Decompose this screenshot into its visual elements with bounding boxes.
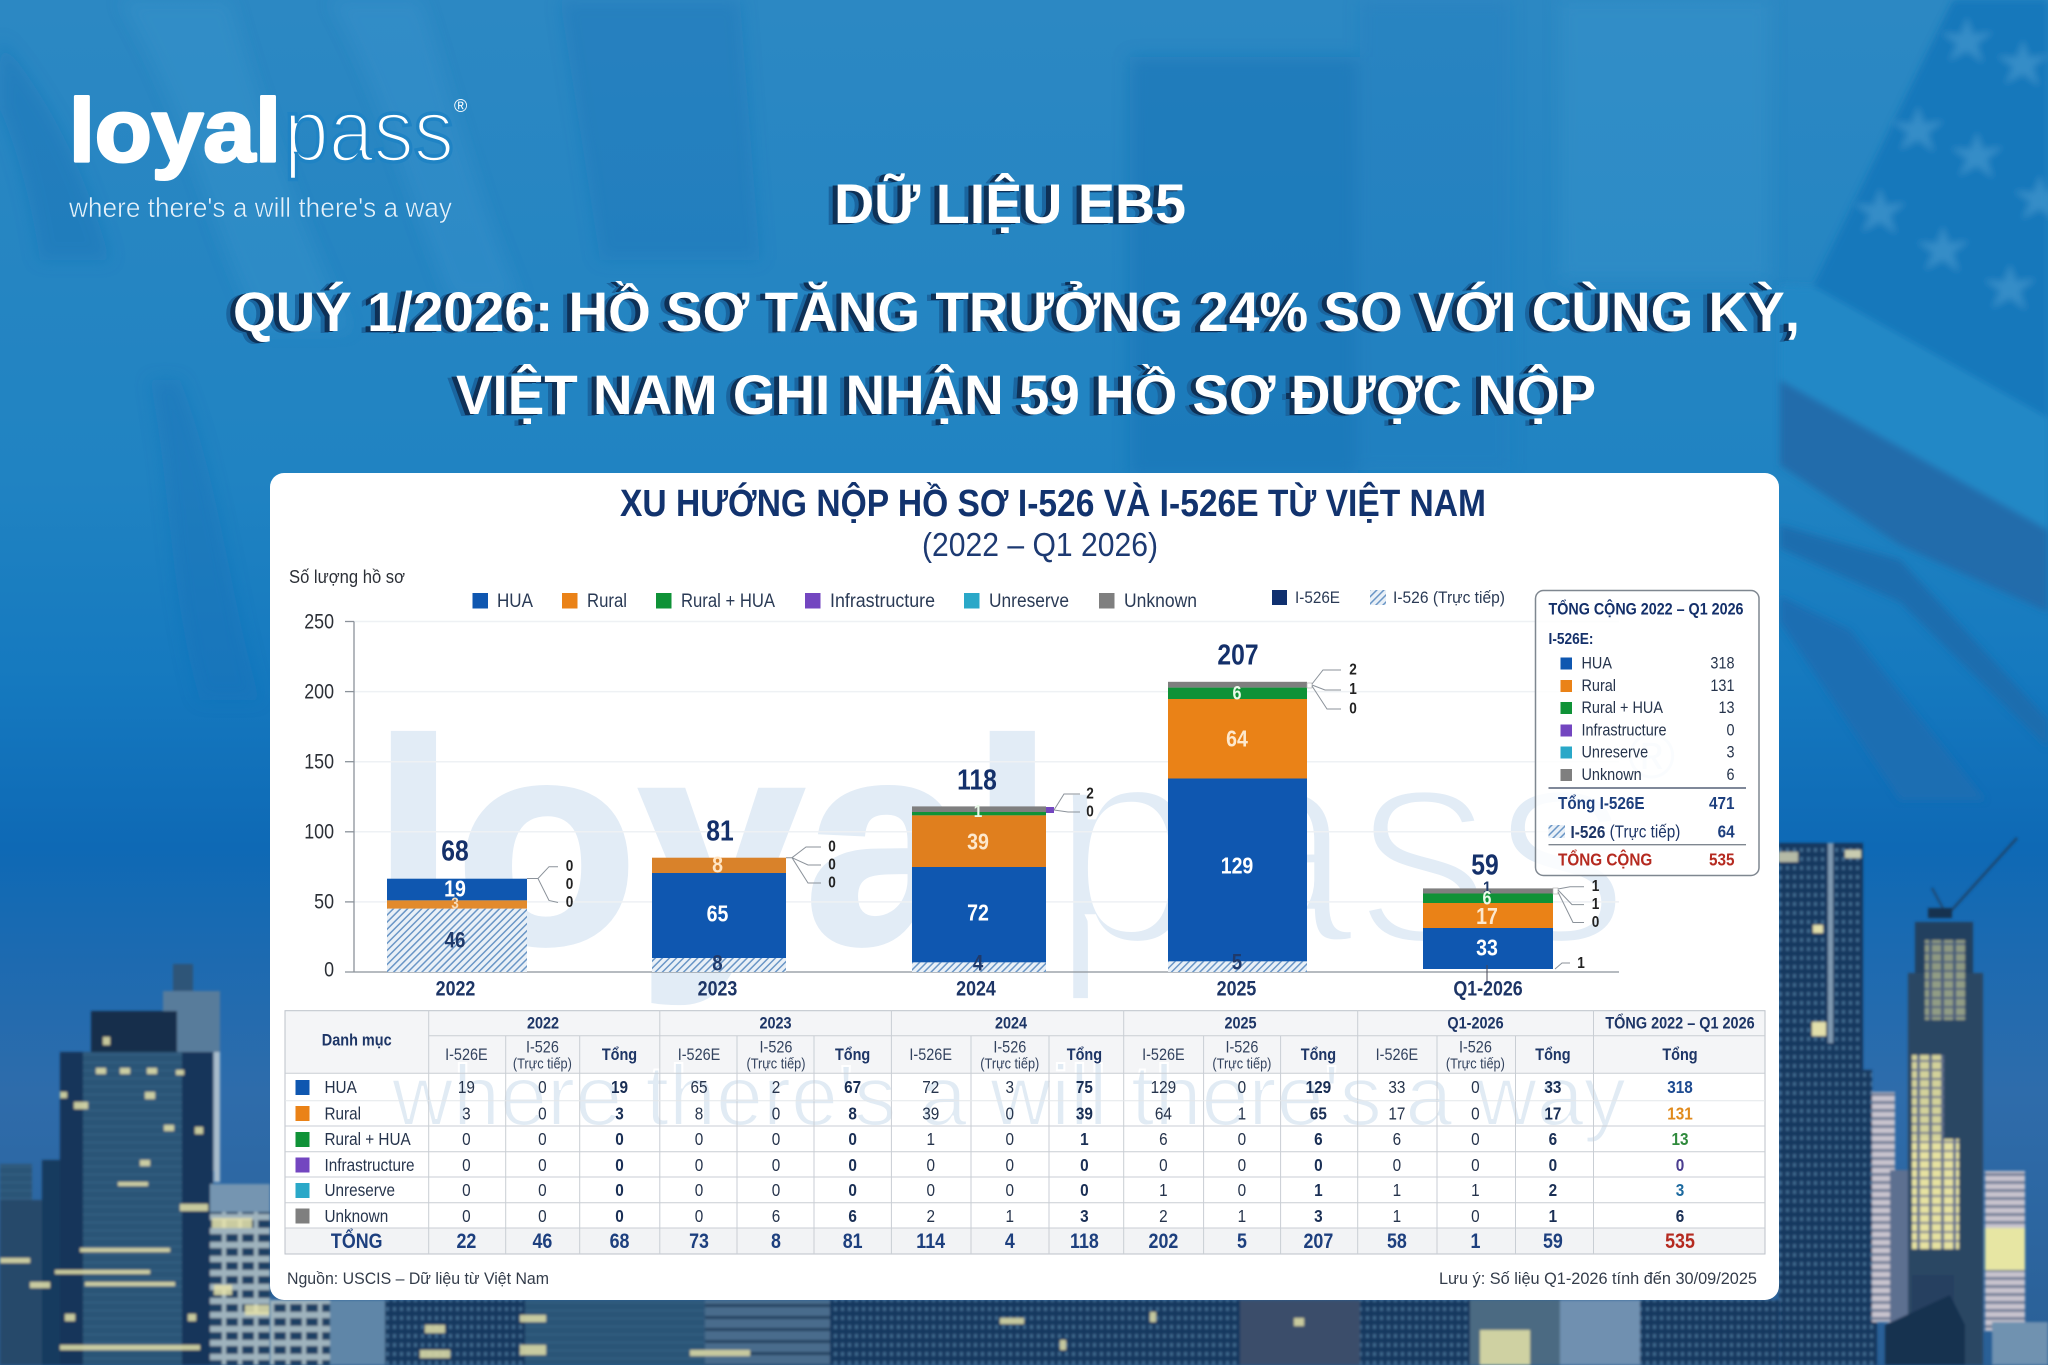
table header: I-526	[993, 1039, 1026, 1057]
summary: category rows: Infrastructure	[1582, 721, 1667, 740]
table row: total: 114	[916, 1229, 945, 1253]
table row: total: 68	[610, 1229, 630, 1253]
table row: Rural + HUA: 0	[1006, 1129, 1014, 1150]
table row: Unreserve: Unreserve	[325, 1180, 395, 1201]
chart: stacked bars	[304, 610, 1619, 1001]
summary: category rows: Rural	[1582, 677, 1616, 695]
bar 2025: 207	[1217, 639, 1259, 671]
bar 2023: 65	[707, 901, 728, 927]
table row: HUA: 318	[1667, 1077, 1693, 1098]
bar 2023: 8	[712, 952, 723, 976]
table row: HUA: 2	[772, 1077, 780, 1098]
axes and gridlines: 50	[314, 890, 334, 914]
table row: Infrastructure: 0	[848, 1155, 857, 1175]
skyline: strip below the card	[270, 1300, 1780, 1365]
table row: Unreserve: 1	[1471, 1180, 1480, 1201]
table row: total	[331, 1227, 1695, 1253]
table row: Infrastructure: 0	[1159, 1155, 1168, 1175]
table row: Unknown: 6	[1676, 1206, 1684, 1226]
axes and gridlines: 200	[304, 680, 334, 704]
table row: Infrastructure: 0	[772, 1155, 780, 1175]
table row: Unknown: 0	[538, 1206, 547, 1226]
table row: HUA: 65	[690, 1077, 708, 1098]
table row: Rural: 64	[1155, 1103, 1172, 1124]
summary: category rows	[1560, 654, 1735, 784]
bar 2024: 4	[973, 952, 984, 976]
table row: Rural: 17	[1388, 1103, 1405, 1124]
panel: totals summary box: I-526 (Trực tiếp)	[1570, 821, 1680, 842]
table header: 2022	[527, 1015, 559, 1033]
bar Q1-2026	[1423, 849, 1599, 982]
axes and gridlines: 150	[304, 750, 334, 774]
table row: HUA: 129	[1151, 1077, 1176, 1098]
table row: Unreserve: 0	[1238, 1180, 1246, 1201]
bar 2024: 1	[974, 801, 982, 821]
summary: category rows: 0	[1726, 721, 1735, 740]
table header: I-526E	[678, 1046, 720, 1064]
x axis labels: Q1-2026	[1453, 977, 1523, 1001]
legend: categories: Rural + HUA	[681, 591, 775, 612]
table row: Infrastructure: Infrastructure	[325, 1155, 415, 1175]
footnote: Lưu ý: Số liệu Q1-2026 tính đến 30/09/2025	[1439, 1269, 1757, 1288]
table row: Rural + HUA	[296, 1129, 1689, 1150]
bar 2022: 3	[451, 895, 459, 913]
bar 2023: 0	[828, 838, 836, 856]
table row: total: 535	[1665, 1229, 1695, 1253]
table row: Unknown: 2	[926, 1206, 935, 1226]
axes and gridlines: 250	[304, 610, 334, 634]
table row: Infrastructure: 0	[615, 1155, 624, 1175]
table row: Rural: 3	[462, 1103, 471, 1124]
table header: Tổng	[602, 1045, 637, 1064]
table header: Tổng	[1535, 1045, 1571, 1064]
table header: (Trực tiếp)	[980, 1055, 1039, 1072]
bar 2022: 0	[566, 894, 573, 911]
table row: Rural: 0	[538, 1103, 547, 1124]
table row: HUA: 0	[538, 1077, 547, 1098]
table header: Tổng	[835, 1045, 870, 1064]
table row: Unknown: 6	[772, 1206, 780, 1226]
bar 2025: 129	[1221, 853, 1253, 879]
table row: Rural	[296, 1103, 1693, 1124]
bar 2024: 2	[1086, 785, 1094, 803]
table header: Tổng	[1067, 1045, 1102, 1064]
table row: Unreserve: 0	[695, 1180, 703, 1201]
table row: Infrastructure: 0	[695, 1155, 703, 1175]
table: data by category and year	[285, 1011, 1765, 1254]
title: headline block	[233, 172, 1800, 426]
table row: Rural + HUA: 1	[926, 1129, 935, 1150]
table row: total: 73	[689, 1229, 709, 1253]
table header: (Trực tiếp)	[1212, 1055, 1271, 1072]
table header: Tổng	[1662, 1045, 1698, 1064]
legend: categories: Unreserve	[989, 591, 1069, 612]
table row: HUA: 67	[844, 1077, 861, 1098]
table row: Rural: 0	[772, 1103, 780, 1124]
table header: I-526	[760, 1039, 793, 1057]
table row: Rural: 39	[1076, 1103, 1093, 1124]
table row: Infrastructure: 0	[538, 1155, 547, 1175]
watermark: loyalpass: pass	[1050, 681, 1630, 1006]
table row: Unknown: 0	[462, 1206, 471, 1226]
table row: total: 118	[1070, 1229, 1099, 1253]
table row: HUA: 19	[458, 1077, 475, 1098]
legend: form types	[1272, 588, 1505, 607]
logo tagline: where there's a will there's a way	[68, 192, 452, 223]
table row: Unknown: 0	[615, 1206, 624, 1226]
table row: Infrastructure: 0	[1006, 1155, 1014, 1175]
bar 2025: 0	[1349, 701, 1357, 718]
table row: Rural: 0	[1006, 1103, 1014, 1124]
bar 2025: 6	[1233, 682, 1242, 704]
bar 2023: 8	[712, 852, 723, 878]
title line 1: DỮ LIỆU EB5	[834, 172, 1186, 235]
table row: total: 8	[771, 1229, 781, 1253]
table row: Unknown: 0	[1471, 1206, 1480, 1226]
table row: Rural + HUA: 0	[462, 1129, 471, 1150]
legend: categories: HUA	[497, 591, 533, 612]
table row: Rural + HUA: 6	[1314, 1129, 1323, 1150]
table row: Rural + HUA: 6	[1159, 1129, 1168, 1150]
bar 2024: 118	[957, 764, 997, 796]
table row: Unknown: 1	[1006, 1206, 1014, 1226]
x axis labels	[436, 977, 1523, 1001]
bar Q1-2026: 0	[1592, 914, 1599, 931]
logo: loyalpass	[68, 80, 467, 223]
table row: Unreserve: 0	[1080, 1180, 1089, 1201]
chart heading: XU HƯỚNG NỘP HỒ SƠ I-526 VÀ I-526E TỪ VIỆT NAM	[620, 480, 1486, 525]
x axis labels: 2025	[1217, 977, 1257, 1001]
table row: Unreserve: 0	[772, 1180, 780, 1201]
table row: Rural + HUA: 0	[772, 1129, 780, 1150]
table row: Infrastructure: 0	[1471, 1155, 1480, 1175]
summary: category rows: 13	[1718, 699, 1735, 717]
legend: form types: I-526 (Trực tiếp)	[1393, 588, 1505, 607]
table row: Rural + HUA: 1	[1080, 1129, 1089, 1150]
table row: Unknown: 1	[1549, 1206, 1557, 1226]
legend: categories: Unknown	[1124, 591, 1197, 612]
bar 2025: 5	[1232, 951, 1242, 975]
table row: Infrastructure: 0	[1676, 1155, 1684, 1175]
table header: I-526	[526, 1039, 559, 1057]
watermark: loyalpass: ®	[1628, 720, 1675, 792]
bar 2024: 0	[1086, 803, 1094, 821]
table row: Rural + HUA: 0	[695, 1129, 703, 1150]
table row: Unreserve: 2	[1549, 1180, 1557, 1201]
table row: HUA: 3	[1006, 1077, 1014, 1098]
legend: categories	[472, 591, 1197, 612]
table row: Unknown: 6	[848, 1206, 857, 1226]
table row: total: 59	[1543, 1229, 1563, 1253]
table row: HUA: 75	[1076, 1077, 1093, 1098]
table header	[322, 1012, 1755, 1072]
table row: HUA: 129	[1306, 1077, 1331, 1098]
table row: Rural + HUA: 13	[1671, 1129, 1689, 1150]
table row: total: TỔNG	[331, 1227, 382, 1253]
table row: HUA: 72	[922, 1077, 939, 1098]
bar 2023: 0	[828, 874, 836, 892]
table row: total: 58	[1387, 1229, 1407, 1253]
table row: total: 202	[1149, 1229, 1178, 1253]
summary: category rows: 3	[1726, 743, 1735, 762]
skyline: right buildings	[1778, 838, 2048, 1365]
table row: Rural: 3	[615, 1103, 624, 1124]
table header: 2023	[759, 1015, 792, 1033]
table row: Rural: 8	[695, 1103, 703, 1124]
bar 2024: 72	[967, 900, 989, 926]
table row: Unreserve: 1	[1159, 1180, 1168, 1201]
panel: totals summary box: TỔNG CỘNG 2022 – Q1 2026	[1548, 600, 1744, 618]
panel: totals summary box: 535	[1709, 849, 1735, 870]
panel: totals summary box: I-526E:	[1548, 631, 1594, 648]
table row: HUA	[296, 1077, 1693, 1098]
panel: white chart card	[270, 473, 1779, 1300]
skyline: left buildings	[0, 964, 270, 1365]
bar Q1-2026: 1	[1592, 878, 1599, 895]
table row: Rural: 65	[1310, 1103, 1327, 1124]
table row: Unknown: 3	[1080, 1206, 1089, 1226]
table row: total: 46	[532, 1229, 552, 1253]
table row: Infrastructure: 0	[1393, 1155, 1401, 1175]
table header: (Trực tiếp)	[746, 1055, 806, 1072]
table row: HUA: 0	[1238, 1077, 1246, 1098]
table row: Unreserve: 0	[1006, 1180, 1014, 1201]
table row: Unreserve: 3	[1676, 1180, 1684, 1201]
axes and gridlines: 100	[304, 820, 334, 844]
table header: I-526E	[909, 1046, 952, 1064]
table row: Rural + HUA: 0	[538, 1129, 547, 1150]
table header: (Trực tiếp)	[513, 1055, 572, 1072]
table row: Infrastructure: 0	[926, 1155, 935, 1175]
source note: Nguồn: USCIS – Dữ liệu từ Việt Nam	[287, 1269, 549, 1288]
table header: 2025	[1224, 1015, 1257, 1033]
table row: Unknown: 0	[695, 1206, 703, 1226]
table row: Rural + HUA: Rural + HUA	[325, 1129, 412, 1150]
table row: Unknown: 1	[1393, 1206, 1401, 1226]
summary: category rows: Rural + HUA	[1582, 699, 1663, 717]
table row: total: 207	[1304, 1229, 1333, 1253]
bar 2022	[387, 835, 573, 972]
table row: Unknown: 3	[1314, 1206, 1323, 1226]
axes and gridlines: 0	[324, 958, 334, 982]
panel: totals summary box: Tổng I-526E	[1558, 793, 1645, 813]
table row: total: 81	[843, 1229, 863, 1253]
summary: category rows: 318	[1710, 654, 1735, 673]
summary: category rows: Unknown	[1582, 766, 1642, 784]
table row: Rural: 0	[1471, 1103, 1480, 1124]
bar 2025	[1168, 639, 1357, 975]
table row: Rural: 39	[922, 1103, 939, 1124]
table row: Infrastructure	[296, 1155, 1684, 1175]
table row: HUA: 19	[611, 1077, 628, 1098]
bar Q1-2026: 1	[1592, 896, 1599, 913]
summary: category rows: Unreserve	[1582, 743, 1648, 762]
bar 2025: 1	[1349, 681, 1357, 698]
table row: HUA: HUA	[325, 1077, 358, 1098]
table row: Unknown: Unknown	[325, 1206, 388, 1226]
table row: Rural + HUA: 0	[1238, 1129, 1246, 1150]
bar Q1-2026: 59	[1471, 849, 1499, 881]
table row: HUA: 33	[1388, 1077, 1405, 1098]
legend: categories: Rural	[587, 591, 627, 612]
table row: Rural + HUA: 0	[848, 1129, 857, 1150]
table header: I-526	[1459, 1039, 1492, 1057]
panel: totals summary box: TỔNG CỘNG	[1558, 849, 1652, 870]
bar Q1-2026: 1	[1483, 879, 1491, 897]
table row: Rural: 131	[1667, 1103, 1693, 1124]
bar 2024	[912, 764, 1094, 976]
bar 2022: 46	[445, 929, 465, 953]
table row: Infrastructure: 0	[462, 1155, 471, 1175]
bar 2022: 19	[444, 876, 466, 902]
table row: Rural: 8	[848, 1103, 857, 1124]
bar 2022: 68	[441, 835, 469, 867]
table row: Rural: 1	[1238, 1103, 1246, 1124]
bar Q1-2026: 17	[1476, 904, 1498, 930]
table header: Tổng	[1301, 1045, 1336, 1064]
table row: Unreserve: 1	[1393, 1180, 1401, 1201]
table row: Unreserve: 0	[538, 1180, 547, 1201]
watermark: loyalpass: loyal	[372, 681, 1054, 1006]
table row: total: 22	[456, 1229, 476, 1253]
summary: category rows: 131	[1710, 677, 1735, 695]
chart subheading: (2022 – Q1 2026)	[922, 526, 1158, 563]
table header: Danh mục	[322, 1032, 392, 1050]
table row: Rural + HUA: 6	[1549, 1129, 1557, 1150]
table row: Rural + HUA: 6	[1393, 1129, 1401, 1150]
table grid	[285, 1011, 1765, 1254]
table row: Unreserve: 1	[1314, 1180, 1323, 1201]
watermark: loyalpass	[372, 681, 1675, 1006]
table row: Infrastructure: 0	[1314, 1155, 1323, 1175]
table row: Unreserve: 0	[462, 1180, 471, 1201]
table row: Unreserve: 0	[615, 1180, 624, 1201]
panel: totals summary box	[1536, 590, 1759, 876]
table row: total: 4	[1005, 1229, 1015, 1253]
panel: totals summary box: 471	[1709, 793, 1735, 813]
table row: Rural + HUA: 0	[1471, 1129, 1480, 1150]
background: American flag	[1780, 0, 2048, 800]
table row: Rural: Rural	[325, 1103, 361, 1124]
panel: totals summary box: 64	[1718, 821, 1735, 842]
bar 2023: 0	[828, 856, 836, 874]
table header: 2024	[995, 1015, 1027, 1033]
table row: Unreserve: 0	[926, 1180, 935, 1201]
watermark: tagline: where there's a will there's a way	[391, 1049, 1626, 1144]
bar 2025: 2	[1349, 662, 1357, 679]
table row: HUA: 33	[1544, 1077, 1561, 1098]
table fills	[285, 1011, 1765, 1254]
table header: TỔNG 2022 – Q1 2026	[1605, 1012, 1755, 1033]
table row: Unknown	[296, 1206, 1684, 1226]
summary: category rows: 6	[1726, 766, 1735, 784]
bar Q1-2026: 6	[1483, 887, 1492, 909]
legend: categories: Infrastructure	[830, 591, 935, 612]
table row: total: 1	[1470, 1229, 1481, 1253]
table row: Unreserve	[296, 1180, 1684, 1201]
table header: I-526E	[445, 1046, 488, 1064]
table header: (Trực tiếp)	[1446, 1055, 1505, 1072]
bar 2022: 0	[566, 876, 573, 893]
bar Q1-2026: 1	[1577, 955, 1585, 972]
logo registered mark: ®	[454, 96, 467, 116]
table row: Infrastructure: 0	[1080, 1155, 1089, 1175]
logo wordmark: pass: pass	[284, 80, 454, 180]
x axis labels: 2022	[436, 977, 476, 1001]
x axis labels: 2023	[698, 977, 738, 1001]
table header: I-526E	[1142, 1046, 1185, 1064]
table row: Unknown: 2	[1159, 1206, 1168, 1226]
legend: form types: I-526E	[1295, 588, 1340, 607]
x axis labels: 2024	[956, 977, 996, 1001]
summary: category rows: HUA	[1582, 654, 1612, 673]
table row: Unknown: 1	[1238, 1206, 1246, 1226]
bar 2025: 64	[1226, 726, 1248, 752]
table row: Infrastructure: 0	[1238, 1155, 1246, 1175]
table row: Rural + HUA: 0	[615, 1129, 624, 1150]
table header: Q1-2026	[1447, 1015, 1504, 1033]
table header: I-526	[1225, 1039, 1259, 1057]
bar Q1-2026: 33	[1476, 935, 1498, 961]
bar 2024: 39	[967, 829, 989, 855]
logo wordmark: loyal: loyal	[69, 80, 281, 180]
table row: Infrastructure: 0	[1549, 1155, 1557, 1175]
table row: HUA: 0	[1471, 1077, 1480, 1098]
table row: Unreserve: 0	[848, 1180, 857, 1201]
bar 2023: 81	[706, 815, 734, 847]
y axis title: Số lượng hồ sơ	[289, 567, 405, 587]
table row: Rural: 17	[1544, 1103, 1561, 1124]
bar 2022: 0	[566, 858, 573, 875]
title line 3: VIỆT NAM GHI NHẬN 59 HỒ SƠ ĐƯỢC NỘP	[456, 363, 1596, 426]
table header: I-526E	[1376, 1046, 1418, 1064]
table row: total: 5	[1237, 1229, 1247, 1253]
bar 2023	[652, 815, 836, 976]
title line 2: QUÝ 1/2026: HỒ SƠ TĂNG TRƯỞNG 24% SO VỚI CÙNG KỲ,	[233, 280, 1800, 343]
axes and gridlines	[304, 610, 1619, 982]
